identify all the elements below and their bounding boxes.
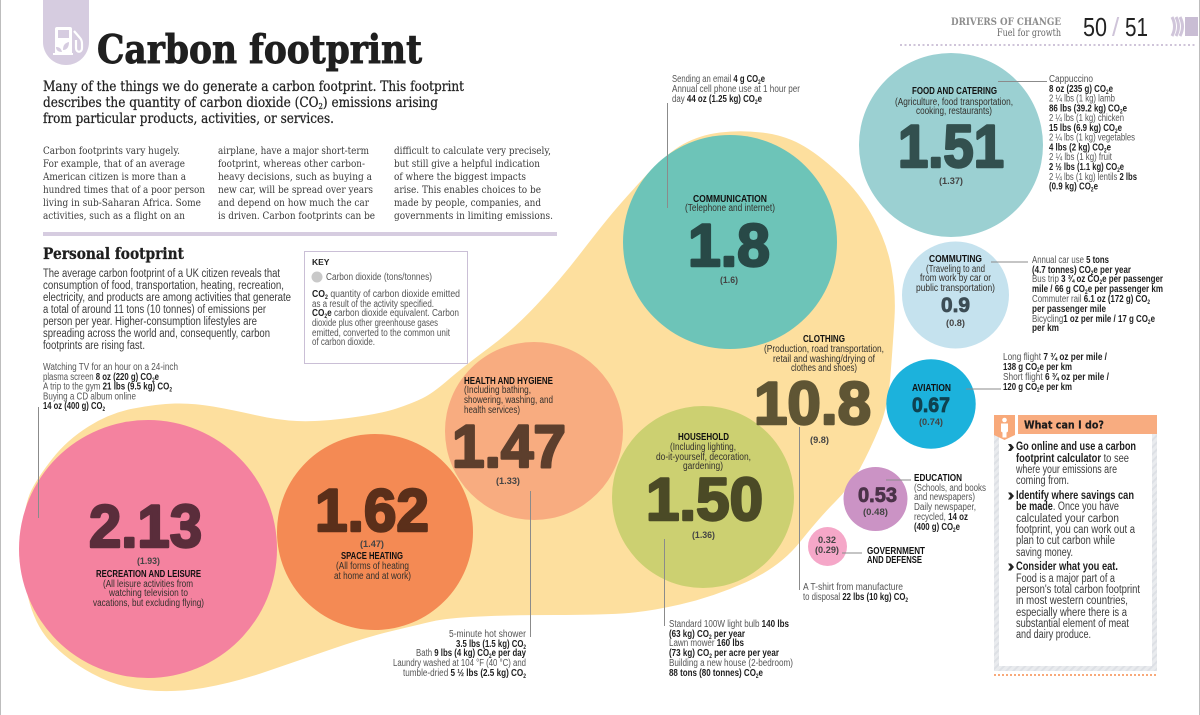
- body text columns: hundred times that of a poor person: [43, 185, 205, 196]
- callout: food examples: [998, 74, 1137, 194]
- callout: education: [886, 473, 986, 534]
- circle: recreation and leisure: RECREATION AND LEISURE: [96, 569, 201, 580]
- personal footprint text: person per year. Higher-consumption lifestyles are: [43, 316, 257, 328]
- callout: food examples: e: [1120, 162, 1124, 173]
- circle: health and hygiene: [445, 342, 623, 520]
- callout: health examples: 2: [523, 645, 527, 651]
- intro text: [43, 79, 464, 127]
- callout: health examples: e per day: [492, 648, 526, 659]
- body text columns: activities, such as a flight on an: [43, 211, 185, 222]
- callout: education: e: [956, 522, 960, 533]
- callout: food examples: 2: [1115, 129, 1118, 135]
- callout: commuting examples: e per year: [1093, 265, 1131, 276]
- circle: household: do-it-yourself, decoration,: [656, 452, 751, 463]
- panel: what can I do: calculated your carbon: [1016, 513, 1119, 525]
- callout: commuting examples: Commuter rail 6.1 oz (172 g) CO: [1032, 294, 1164, 305]
- callout: aviation examples: 2: [1037, 388, 1040, 394]
- callout: food examples: 2: [1117, 168, 1120, 174]
- body text columns: is driven. Carbon footprints can be: [218, 211, 375, 222]
- callout: household examples: [664, 539, 793, 680]
- callout: health examples: 5-minute hot shower: [449, 629, 527, 640]
- callout: food examples: 2: [1091, 188, 1094, 194]
- callout: commuting examples: e: [1151, 314, 1155, 325]
- circle: communication: (Telephone and internet): [685, 203, 775, 214]
- circle: recreation and leisure: 2.13: [89, 493, 202, 560]
- personal footprint text: [43, 268, 291, 352]
- callout: recreation examples: Buying a CD album online: [43, 392, 136, 402]
- panel: what can I do: substantial element of meat: [1016, 618, 1130, 630]
- callout: food examples: 2 ¼ lbs (1 kg) vegetables: [1049, 132, 1135, 144]
- panel: key: quantity of carbon dioxide emitted: [328, 289, 460, 300]
- blob label: clothing: [754, 334, 884, 446]
- callout: education: Daily newspaper,: [914, 502, 976, 513]
- callout: commuting examples: mile / 66 g CO: [1032, 284, 1085, 295]
- callout: household examples: e: [759, 668, 763, 679]
- yellow footprint blob: [22, 131, 895, 691]
- callout: household examples: per year: [712, 629, 745, 640]
- body text columns: and depend on how much the car: [218, 198, 369, 209]
- circle: education: [844, 467, 908, 531]
- circle: health and hygiene: 1.47: [452, 413, 566, 480]
- circle: communication: 1.8: [688, 212, 770, 279]
- callout: government and defense: GOVERNMENT: [867, 546, 925, 557]
- panel: key: 2: [324, 314, 328, 320]
- body text columns: of where the biggest impacts: [394, 172, 526, 183]
- body text columns: footprint, whereas other carbon-: [218, 159, 365, 170]
- circle: commuting: COMMUTING: [929, 254, 982, 265]
- callout: education: 2: [953, 528, 956, 534]
- panel: what can I do: especially where there is a: [1016, 607, 1127, 619]
- body text columns: but still give a helpful indication: [394, 159, 540, 170]
- personal footprint text: a total of around 11 tons (10 tonnes) of emissions per: [43, 304, 266, 316]
- intro text: 2: [319, 102, 323, 111]
- callout: food examples: e: [1107, 142, 1111, 154]
- body text columns: governments in limiting emissions.: [394, 211, 553, 222]
- callout: food examples: 8 oz (235 g) CO: [1049, 84, 1106, 95]
- callout: recreation examples: 2: [169, 388, 173, 394]
- circle: commuting: (Traveling to and: [926, 264, 985, 275]
- body text columns: For example, that of an average: [43, 159, 185, 170]
- circle: food and catering: cooking, restaurants): [916, 106, 992, 117]
- blob label: clothing: (9.8): [810, 435, 829, 446]
- callout: food examples: 2 ½ lbs (1.1 kg) CO: [1049, 162, 1117, 173]
- circle: space heating: (All forms of heating: [336, 561, 409, 572]
- circle: recreation and leisure: watching television to: [108, 588, 188, 599]
- callout: government and defense: AND DEFENSE: [867, 555, 922, 566]
- panel: key: [304, 252, 468, 364]
- callout: aviation examples: e per km: [1040, 362, 1072, 373]
- callout: communication examples: day 44 oz (1.25 kg) CO: [672, 94, 773, 105]
- callout: food examples: 2: [1104, 148, 1107, 154]
- panel: what can I do: Food is a major part of a: [1016, 573, 1115, 585]
- circle: health and hygiene: (Including bathing,: [464, 385, 531, 396]
- callout: health examples: Laundry washed at 104 °F (40 °C) and: [393, 658, 526, 669]
- circle: education: (0.48): [863, 507, 888, 518]
- icon: page tab: [1172, 17, 1198, 36]
- panel: key: e: [327, 308, 332, 319]
- callout: health examples: 3.5 lbs (1.5 kg) CO: [456, 639, 524, 650]
- circle: household: gardening): [683, 461, 723, 472]
- callout: household examples: (73 kg) CO: [669, 648, 709, 659]
- callout: food examples: e: [1109, 84, 1113, 95]
- blob label: clothing: CLOTHING: [803, 334, 845, 345]
- panel: key: CO: [312, 308, 325, 319]
- callout: aviation examples: 2: [1037, 368, 1040, 374]
- panel: what can I do: Go online and use a carbon: [1016, 441, 1136, 453]
- blob label: clothing: (Production, road transportation,: [764, 344, 884, 355]
- callout: clothing example: 2: [905, 598, 909, 604]
- circle: aviation: 0.67: [912, 394, 950, 417]
- body text columns: arise. This enables choices to be: [394, 185, 541, 196]
- circle: communication: COMMUNICATION: [693, 194, 767, 205]
- callout: communication examples: Annual cell phone use at 1 hour per: [672, 84, 801, 95]
- panel: what can I do: plan to cut carbon while: [1016, 535, 1115, 547]
- callout: communication examples: 2: [758, 80, 761, 86]
- subheading: personal footprint: Personal footprint: [43, 244, 185, 263]
- callout: commuting examples: 2: [1091, 271, 1094, 277]
- circle: recreation and leisure: [19, 420, 277, 678]
- body text columns: Carbon footprints vary hugely.: [43, 146, 180, 157]
- title: Carbon footprint: [97, 27, 422, 73]
- blob label: clothing: retail and washing/drying of: [773, 354, 875, 365]
- blob label: clothing: 10.8: [754, 370, 871, 437]
- header: section name and page numbers: 51: [1125, 12, 1148, 42]
- callout: food examples: 2 ¼ lbs (1 kg) lentils 2 lbs: [1049, 171, 1137, 183]
- circle: food and catering: FOOD AND CATERING: [912, 86, 997, 97]
- callout: commuting examples: 2: [1148, 320, 1151, 326]
- circle: household: HOUSEHOLD: [678, 432, 729, 443]
- intro text: Many of the things we do generate a carbon footprint. This footprint: [43, 79, 464, 95]
- callout: commuting examples: Bus trip 3 ¾ oz CO: [1032, 274, 1109, 285]
- panel: what can I do: coming from.: [1016, 475, 1069, 487]
- callout: recreation examples: [38, 362, 178, 518]
- header: section name and page numbers: [951, 12, 1148, 42]
- callout: communication examples: Sending an email 4 g CO: [672, 74, 766, 85]
- panel: key: Carbon dioxide (tons/tonnes): [326, 272, 432, 283]
- panel: key: carbon dioxide equivalent. Carbon: [334, 308, 486, 319]
- circle: food and catering: (Agriculture, food transportation,: [895, 97, 1013, 108]
- panel: what can I do: Consider what you eat.: [1016, 561, 1118, 573]
- callout: commuting examples: per passenger mile: [1032, 304, 1106, 315]
- panel: key: of carbon dioxide.: [312, 337, 375, 348]
- circle: health and hygiene: (1.33): [496, 476, 520, 487]
- callout: education: (400 g) CO: [914, 522, 953, 533]
- circle: food and catering: [859, 53, 1043, 237]
- circle: space heating: at home and at work): [334, 571, 411, 582]
- body text columns: airplane, have a major short-term: [218, 146, 369, 157]
- header: section name and page numbers: DRIVERS OF CHANGE: [951, 17, 1061, 28]
- circle: government and defense: 0.32: [818, 535, 836, 546]
- panel: key: emitted, converted to the common unit: [312, 328, 450, 339]
- circle: recreation and leisure: (1.93): [137, 556, 160, 567]
- panel: what can I do: and dairy produce.: [1016, 629, 1091, 641]
- circle: space heating: SPACE HEATING: [341, 551, 403, 562]
- circle: space heating: (1.47): [360, 539, 384, 550]
- callout: commuting examples: (4.7 tonnes) CO: [1032, 265, 1091, 276]
- callout: food examples: Cappuccino: [1049, 74, 1093, 85]
- panel: what can I do: saving money.: [1016, 547, 1073, 559]
- body text columns: made by people, companies, and: [394, 198, 542, 209]
- panel: key: dioxide plus other greenhouse gases: [312, 318, 438, 329]
- panel: what can I do: in most western countries,: [1016, 595, 1128, 607]
- body text columns: living in sub-Saharan Africa. Some: [43, 198, 201, 209]
- circle: food and catering: 1.51: [898, 113, 1004, 180]
- body text columns: heavy decisions, such as buying a: [218, 172, 372, 183]
- callout: food examples: 2: [1106, 90, 1109, 96]
- callout: commuting examples: Bicycling1 oz per mile / 17 g CO: [1032, 314, 1170, 325]
- panel: what can I do: where your emissions are: [1015, 464, 1117, 476]
- panel: key: as a result of the activity specified.: [312, 299, 434, 310]
- personal footprint text: footprints are rising fast.: [43, 340, 145, 352]
- circle: space heating: [277, 434, 473, 630]
- callout: health examples: tumble-dried 5 ½ lbs (2.5 kg) CO: [403, 668, 540, 679]
- heading bar: [1018, 415, 1157, 434]
- heading bar: What can I do?: [1024, 418, 1104, 432]
- intro text: from particular products, activities, or services.: [43, 111, 334, 127]
- callout: health examples: 2: [523, 674, 527, 680]
- callout: food examples: 2 ¼ lbs (1 kg) fruit: [1049, 151, 1112, 163]
- header: section name and page numbers: Fuel for growth: [997, 28, 1061, 39]
- circle: household: (1.36): [692, 530, 715, 541]
- callout: food examples: (0.9 kg) CO: [1049, 182, 1091, 192]
- callout: household examples: Lawn mower 160 lbs: [669, 638, 744, 649]
- callout: recreation examples: 2: [152, 378, 155, 384]
- callout: household examples: 88 tons (80 tonnes) CO: [669, 668, 756, 679]
- circle: food and catering: (1.37): [939, 176, 963, 187]
- intro text: describes the quantity of carbon dioxide (CO: [43, 95, 362, 111]
- panel: what can I do: footprint calculator to see: [1016, 453, 1129, 465]
- callout: recreation examples: A trip to the gym 21 lbs (9.5 kg) CO: [43, 382, 187, 392]
- callout: clothing example: A T-shirt from manufacture: [803, 582, 903, 593]
- blob label: clothing: clothes and shoes): [791, 363, 857, 374]
- callout: communication examples: e: [758, 94, 762, 105]
- callout: household examples: Building a new house (2-bedroom): [669, 658, 793, 669]
- callout: communication examples: e: [761, 74, 765, 85]
- circle: government and defense: [808, 527, 847, 566]
- callout: commuting examples: e per passenger: [1102, 274, 1163, 285]
- body text columns: American citizen is more than a: [42, 172, 186, 183]
- callout: commuting examples: per km: [1032, 323, 1059, 334]
- circle: aviation: [886, 359, 976, 449]
- callout: recreation examples: 2: [102, 407, 106, 413]
- circle: communication: (1.6): [720, 275, 738, 286]
- callout: commuting examples: 2: [1099, 280, 1103, 286]
- panel: key: KEY: [312, 257, 330, 267]
- callout: aviation examples: 120 g CO: [1003, 382, 1037, 393]
- intro text: ) emissions arising: [323, 95, 438, 111]
- circle: household: [612, 406, 794, 588]
- personal footprint text: consumption of food, transportation, heating, recreation,: [43, 280, 284, 292]
- callout: household examples: (63 kg) CO: [669, 629, 709, 640]
- icon: fuel pump with leaf tab: [43, 0, 89, 65]
- panel: what can I do: be made. Once you have: [1016, 501, 1119, 513]
- callout: food examples: e: [1094, 182, 1098, 192]
- panel: what can I do: person's total carbon footprint: [1016, 584, 1141, 596]
- callout: education: (Schools, and books: [914, 483, 986, 494]
- callout: communication examples: [668, 74, 801, 208]
- panel: key: CO: [312, 289, 325, 300]
- circle: health and hygiene: health services): [464, 405, 520, 416]
- callout: clothing example: [800, 427, 909, 604]
- header: section name and page numbers: 50: [1083, 12, 1107, 42]
- callout: food examples: 86 lbs (39.2 kg) CO: [1049, 104, 1120, 114]
- panel: what can I do: Identify where savings can: [1016, 490, 1134, 502]
- body text columns: new car, will be spread over years: [218, 185, 373, 196]
- callout: aviation examples: 138 g CO: [1003, 362, 1037, 373]
- circle: aviation: (0.74): [919, 417, 943, 428]
- circle: recreation and leisure: vacations, but excluding flying): [93, 598, 204, 609]
- panel: what can I do: footprint, you can work out a: [1016, 524, 1135, 536]
- circle: space heating: 1.62: [315, 477, 429, 544]
- callout: commuting examples: 2: [1147, 300, 1151, 306]
- callout: commuting examples: Annual car use 5 tons: [1032, 255, 1109, 266]
- callout: commuting examples: [991, 255, 1163, 334]
- panel: key: 2: [325, 295, 328, 301]
- callout: health examples: 2: [489, 654, 492, 660]
- body text columns: difficult to calculate very precisely,: [394, 146, 551, 157]
- callout: food examples: 2: [1120, 110, 1123, 116]
- circle: recreation and leisure: (All leisure activities from: [103, 579, 193, 590]
- callout: education: recycled, 14 oz: [914, 512, 968, 523]
- callout: aviation examples: [966, 352, 1109, 394]
- callout: food examples: 2 ¼ lbs (1 kg) chicken: [1049, 112, 1124, 124]
- panel: what can I do: [994, 415, 1157, 671]
- circle: commuting: public transportation): [916, 283, 995, 294]
- callout: food examples: e: [1123, 104, 1127, 114]
- circle: household: (Including lighting,: [670, 442, 736, 453]
- callout: education: and newspapers): [914, 492, 975, 503]
- callout: food examples: 2 ¼ lbs (1 kg) lamb: [1049, 92, 1115, 104]
- body text columns: [42, 146, 553, 222]
- personal footprint text: spreading across the world and, consequently, carbon: [43, 328, 270, 340]
- circle: household: 1.50: [646, 466, 763, 533]
- callout: commuting examples: 2: [1085, 290, 1088, 296]
- circle: government and defense: (0.29): [815, 545, 839, 556]
- callout: clothing example: to disposal 22 lbs (10 kg) CO: [803, 592, 923, 603]
- callout: aviation examples: Long flight 7 ¾ oz per mile /: [1003, 352, 1107, 363]
- circle: health and hygiene: showering, washing, and: [464, 395, 553, 406]
- icon: person tab: [994, 415, 1015, 440]
- personal footprint text: electricity, and products are among activities that generate: [43, 292, 291, 304]
- callout: government and defense: [842, 546, 925, 566]
- callout: recreation examples: plasma screen 8 oz (220 g) CO: [43, 372, 168, 383]
- circle: education: 0.53: [858, 484, 897, 507]
- callout: aviation examples: e per km: [1040, 382, 1072, 393]
- callout: food examples: 15 lbs (6.9 kg) CO: [1049, 123, 1115, 134]
- callout: aviation examples: Short flight 6 ¾ oz per mile /: [1003, 372, 1109, 383]
- callout: communication examples: 2: [755, 100, 758, 106]
- callout: recreation examples: e: [155, 372, 159, 383]
- callout: recreation examples: 14 oz (400 g) CO: [43, 401, 103, 412]
- header: section name and page numbers: /: [1112, 12, 1120, 42]
- circle: commuting: from work by car or: [920, 273, 992, 284]
- circle: communication: [623, 135, 837, 349]
- callout: household examples: Standard 100W light bulb 140 lbs: [669, 619, 789, 630]
- callout: health examples: Bath 9 lbs (4 kg) CO: [416, 648, 504, 659]
- callout: household examples: per acre per year: [712, 648, 779, 659]
- circle: health and hygiene: HEALTH AND HYGIENE: [464, 376, 553, 387]
- personal footprint text: The average carbon footprint of a UK citizen reveals that: [43, 268, 281, 280]
- circle: commuting: [902, 242, 1009, 348]
- circle: aviation: AVIATION: [912, 383, 951, 394]
- callout: household examples: 2: [709, 654, 712, 660]
- callout: food examples: 4 lbs (2 kg) CO: [1049, 142, 1104, 154]
- callout: health examples: [393, 491, 530, 680]
- circle: commuting: (0.8): [946, 318, 965, 329]
- circle: commuting: 0.9: [941, 294, 970, 317]
- callout: household examples: 2: [756, 674, 759, 680]
- callout: household examples: 2: [709, 635, 712, 641]
- callout: education: EDUCATION: [914, 473, 962, 484]
- callout: commuting examples: e per passenger km: [1088, 284, 1163, 295]
- callout: food examples: e: [1118, 123, 1122, 134]
- callout: recreation examples: Watching TV for an hour on a 24-inch: [43, 362, 178, 373]
